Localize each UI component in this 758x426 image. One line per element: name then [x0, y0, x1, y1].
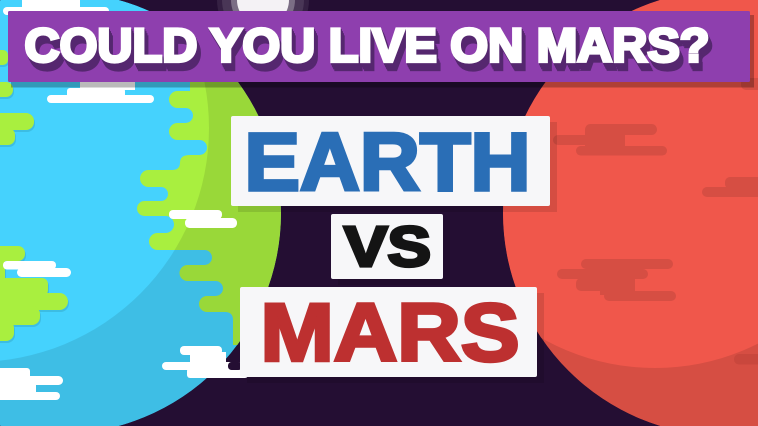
- spot: bottom right: [734, 354, 758, 364]
- spot: top right: [741, 78, 758, 90]
- spot: lower: [557, 259, 676, 301]
- cloud: middle: [169, 210, 237, 228]
- banner shadow: [11, 15, 754, 88]
- label box shadows: [238, 122, 557, 383]
- banner: [8, 11, 750, 82]
- title: COULD YOU LIVE ON MARS?: [24, 18, 710, 72]
- label: VS: VS: [344, 215, 431, 279]
- label: MARS: MARS: [260, 287, 520, 378]
- cloud: left: [3, 261, 71, 277]
- label: VS: [331, 214, 443, 279]
- spot: upper: [553, 124, 667, 156]
- land: right continent: [137, 82, 281, 345]
- moon: [217, 0, 309, 46]
- cloud: top: [3, 0, 109, 15]
- cloud: bottom right: [162, 346, 248, 378]
- land: left continents: [0, 50, 68, 341]
- planet: Mars: [503, 0, 758, 426]
- planet: Earth: [0, 0, 300, 426]
- earth shading: [0, 82, 281, 426]
- clouds: [0, 0, 248, 400]
- cloud: under banner: [47, 78, 154, 103]
- cloud: bottom left: [0, 368, 63, 400]
- mars spots: [553, 78, 758, 364]
- spot: right: [702, 177, 758, 197]
- label: EARTH: EARTH: [244, 117, 530, 208]
